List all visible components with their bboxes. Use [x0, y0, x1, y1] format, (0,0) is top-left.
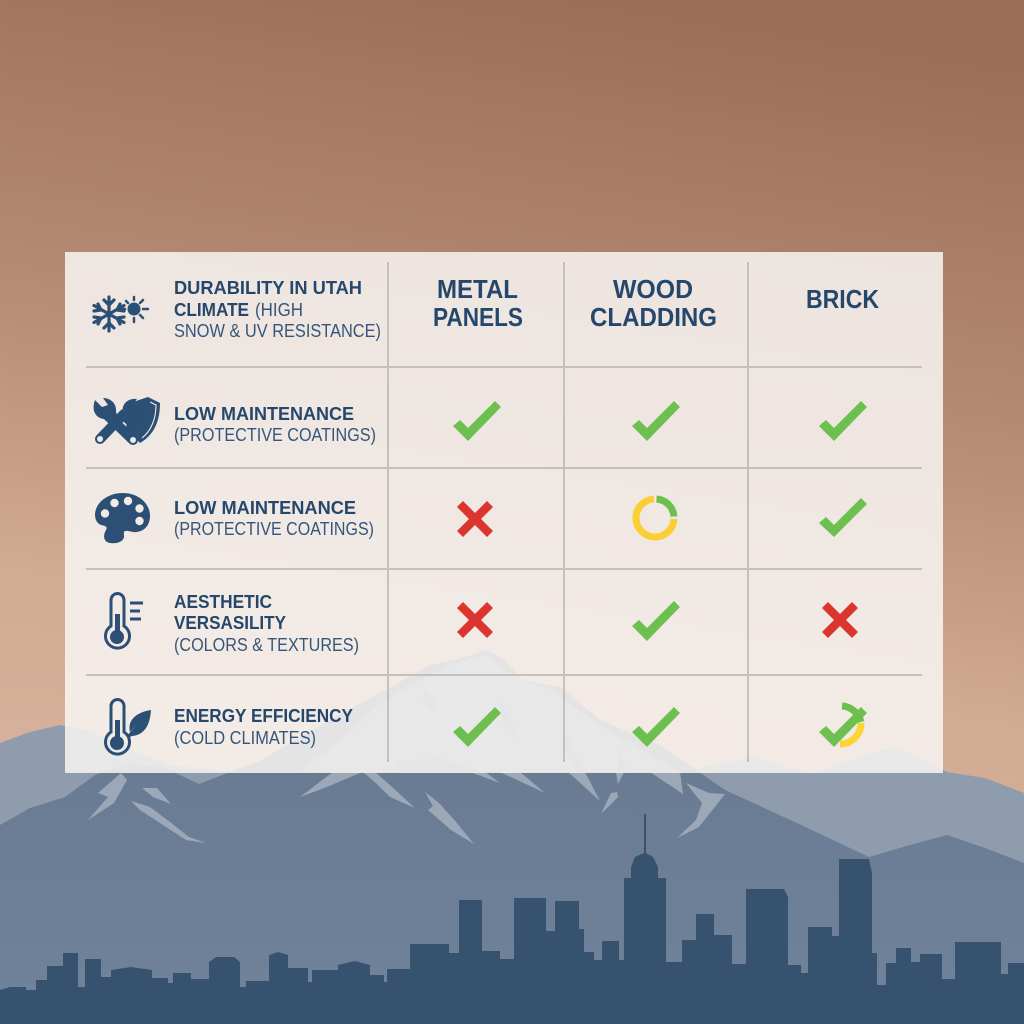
row 1: durability label: CLIMATE — [174, 300, 249, 320]
row 4: wood check — [632, 601, 680, 641]
row 3: metal cross — [460, 504, 490, 534]
row 1: durability label: (HIGH — [255, 300, 303, 320]
row 1: durability label: SNOW & UV RESISTANCE) — [174, 321, 381, 341]
row 3: low maintenance label: LOW MAINTENANCE — [174, 498, 356, 518]
row 3: wood partial ring — [636, 499, 674, 537]
city skyline silhouette — [0, 814, 1024, 1024]
row 2: low maintenance label — [174, 404, 376, 445]
row 4: aesthetic versatility label — [174, 592, 359, 655]
snow streaks — [88, 772, 725, 844]
row 4: brick cross — [825, 605, 855, 635]
panel background — [65, 252, 943, 773]
row 2: low maintenance label: LOW MAINTENANCE — [174, 404, 354, 424]
row 4: aesthetic versatility label: (COLORS & TEXTURES) — [174, 635, 359, 655]
row 1: snowflake and sun icon — [94, 297, 148, 331]
row 4: metal cross — [460, 605, 490, 635]
row 3: low maintenance label — [174, 498, 374, 539]
row 5: brick check with partial arc — [819, 706, 867, 747]
row 3: low maintenance label: (PROTECTIVE COATINGS) — [174, 519, 374, 539]
row 5: thermometer and leaf icon — [106, 700, 151, 754]
column header: metal panels: METAL — [437, 274, 518, 304]
row 1: durability label — [174, 278, 381, 341]
column header: wood cladding — [590, 274, 717, 332]
row 2: wood check — [632, 401, 680, 441]
row 4: aesthetic versatility label: VERSASILITY — [174, 613, 286, 633]
column header: brick: BRICK — [806, 284, 879, 314]
column header: wood cladding: CLADDING — [590, 302, 717, 332]
row 3: palette icon — [95, 493, 150, 543]
snow cap valleys — [395, 690, 626, 772]
column header: metal panels: PANELS — [433, 302, 523, 332]
row 4: thermometer icon — [106, 594, 143, 648]
row 2: low maintenance label: (PROTECTIVE COATINGS) — [174, 425, 376, 445]
row 2: brick check — [819, 401, 867, 441]
row 5: energy efficiency label — [174, 706, 353, 748]
row 5: metal check — [453, 707, 501, 747]
row 5: energy efficiency label: ENERGY EFFICIENCY — [174, 706, 353, 726]
back mountain range — [0, 725, 1024, 1024]
row 2: tools and shield icon — [94, 397, 160, 443]
row 5: energy efficiency label: (COLD CLIMATES) — [174, 728, 316, 748]
column header: metal panels — [433, 274, 523, 332]
row 1: durability label: DURABILITY IN UTAH — [174, 278, 362, 298]
comparison table panel — [65, 252, 943, 773]
row 3: brick check — [819, 498, 867, 537]
sky background — [0, 0, 1024, 800]
column header: wood cladding: WOOD — [613, 274, 693, 304]
row 2: metal check — [453, 401, 501, 441]
front mountain with snow peak — [0, 650, 1024, 1024]
row 4: aesthetic versatility label: AESTHETIC — [174, 592, 272, 612]
table grid lines — [86, 262, 922, 762]
row 5: wood check — [632, 707, 680, 747]
snow cap — [300, 654, 680, 772]
